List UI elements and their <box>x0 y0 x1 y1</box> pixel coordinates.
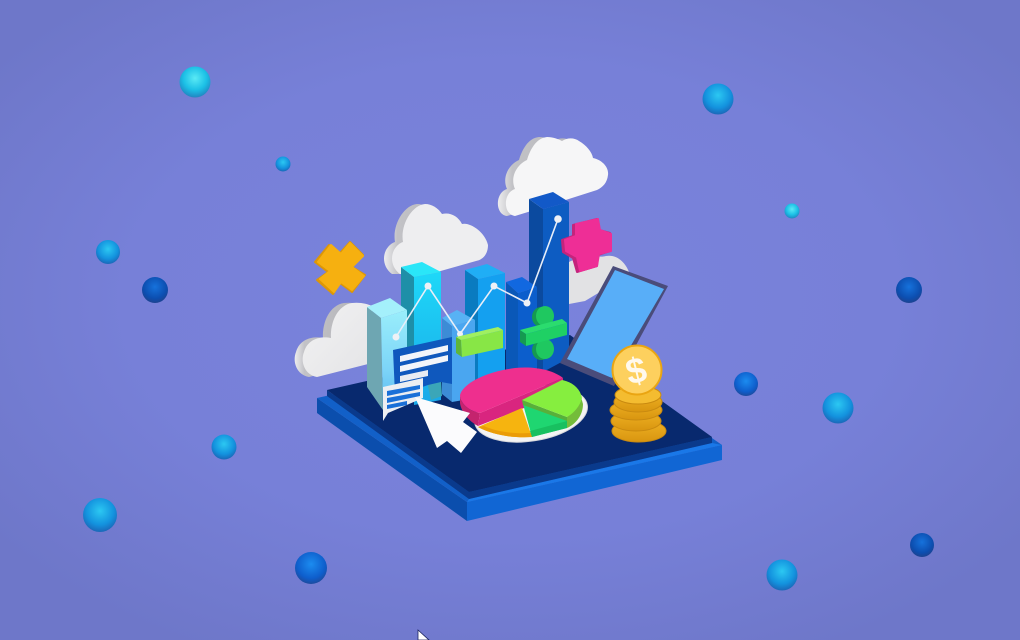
cloud: behind phone <box>569 256 629 304</box>
coin 4 <box>614 392 662 412</box>
line chart <box>392 215 562 340</box>
platform front rim highlight <box>467 443 722 502</box>
large sphere bottom left <box>83 498 117 532</box>
coin 5 <box>615 386 661 404</box>
sphere left <box>96 240 120 264</box>
pink slice <box>460 367 563 426</box>
division bar <box>520 319 567 346</box>
orange cross icon <box>315 242 365 294</box>
green minus block <box>456 327 503 357</box>
sign text line 1 <box>400 345 448 362</box>
line chart node 4 <box>490 282 498 290</box>
cloud: centre <box>384 204 488 274</box>
light bar <box>367 298 407 410</box>
blue sphere bottom <box>295 552 327 584</box>
teal base under sign <box>427 380 442 400</box>
cyan bar <box>401 262 441 405</box>
top dot <box>532 306 554 327</box>
platform left side <box>317 398 467 521</box>
line chart node 1 <box>392 334 400 340</box>
blue bar <box>465 264 505 400</box>
platform base <box>317 335 722 521</box>
bubble line 2 <box>387 392 420 403</box>
sign text line 2 <box>400 355 448 372</box>
pie chart <box>460 367 592 450</box>
coin 2 <box>611 411 661 431</box>
small sphere upper right <box>784 204 800 218</box>
dark sphere right <box>896 277 922 303</box>
arrow cursor <box>415 397 477 453</box>
phone <box>560 266 668 386</box>
dark green slice <box>523 404 567 437</box>
line chart node 2 <box>424 282 432 290</box>
dark blue bar <box>506 277 537 385</box>
sign text line 3 <box>400 370 428 382</box>
bottom dot <box>532 339 554 360</box>
dark top side <box>327 390 712 499</box>
green division sign <box>520 306 567 360</box>
orange slice <box>478 408 532 437</box>
floating spheres <box>83 66 934 590</box>
small sphere upper left <box>276 156 290 172</box>
coin stack <box>610 346 666 442</box>
platform right side <box>467 445 722 521</box>
sphere lower left <box>212 434 236 460</box>
sphere top left <box>180 66 210 98</box>
dark sphere bottom right <box>910 533 934 557</box>
cloud: top right <box>498 137 608 216</box>
platform rim <box>317 341 722 502</box>
bubble line 3 <box>387 401 407 409</box>
line chart node 5 <box>524 300 530 306</box>
cloud: lower left <box>295 303 372 377</box>
small chat bubble <box>383 378 423 421</box>
small light blue bar <box>442 310 475 402</box>
line chart node 3 <box>457 331 463 337</box>
sphere top right <box>702 84 734 114</box>
pink plus icon <box>562 219 611 272</box>
pie base plate <box>470 378 592 450</box>
coin 1 <box>612 420 666 442</box>
dollar sign: $ <box>621 348 651 393</box>
blue sign board <box>393 337 452 395</box>
tall dark blue bar <box>529 192 569 372</box>
dark top <box>327 335 712 492</box>
mouse pointer <box>418 630 429 640</box>
bubble line 1 <box>387 385 420 396</box>
blue sphere right <box>734 372 758 396</box>
line chart node 6 <box>554 215 562 223</box>
front dollar coin <box>612 346 662 394</box>
light green slice <box>522 380 583 428</box>
sphere right <box>822 392 854 424</box>
dark sphere left <box>142 277 168 303</box>
phone screen <box>567 270 664 378</box>
sphere bottom right <box>766 560 798 590</box>
coin 3 <box>610 400 662 420</box>
